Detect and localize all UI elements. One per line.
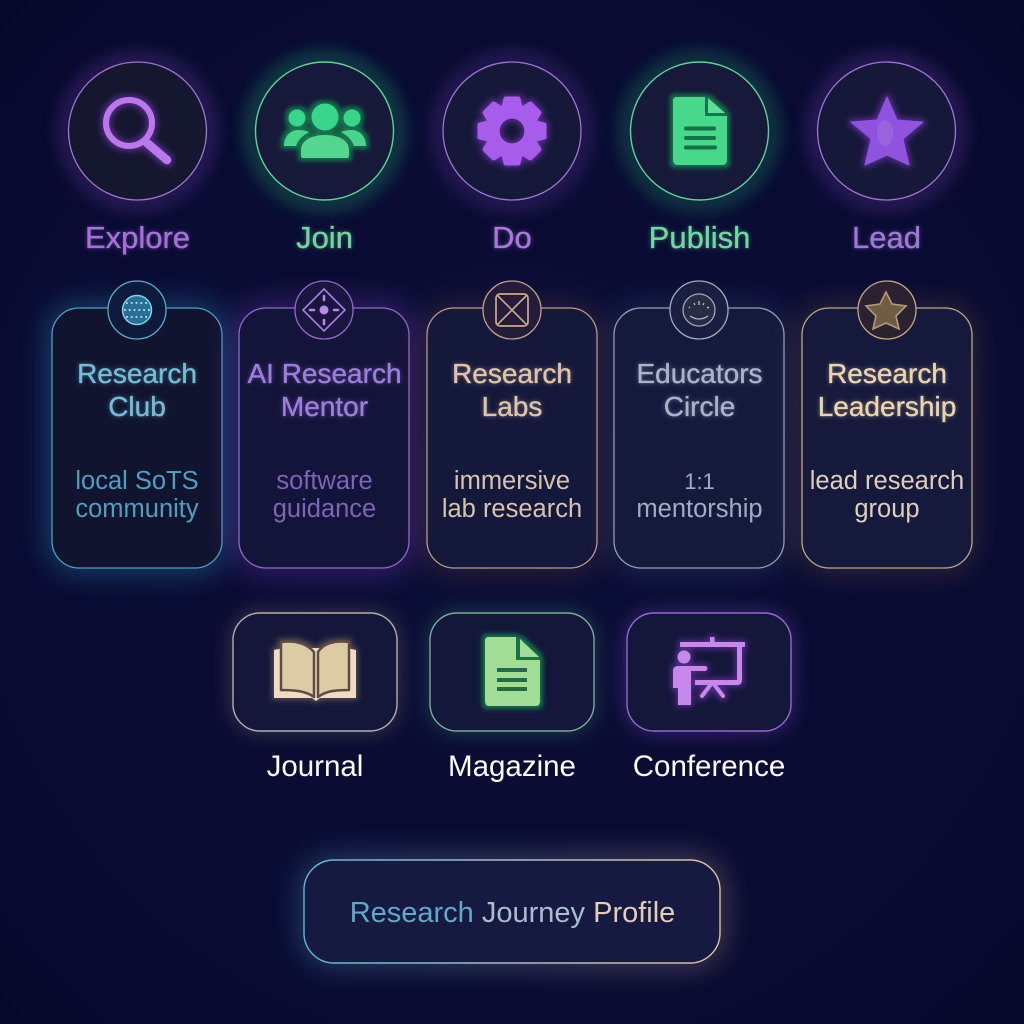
icon: gear <box>478 96 546 166</box>
step: Publish <box>628 59 772 255</box>
card title: Research <box>452 358 572 389</box>
icon: group of people <box>284 104 366 158</box>
icon: dotted globe badge <box>108 281 166 339</box>
card description: group <box>854 495 920 523</box>
card title: Leadership <box>818 391 956 422</box>
step: Explore <box>66 59 210 255</box>
card title: Circle <box>664 391 735 422</box>
card title: Educators <box>636 358 763 389</box>
label: Conference: Conference <box>633 750 785 783</box>
card description: software <box>276 467 373 495</box>
icon: diamond node badge <box>295 281 353 339</box>
card: AI Research Mentor <box>239 281 409 568</box>
card: Research Club <box>52 281 222 568</box>
step row: journey stages <box>66 59 958 255</box>
profile button <box>304 860 720 963</box>
icon: gold star badge <box>858 281 916 339</box>
card title: Labs <box>482 391 542 422</box>
icon: round dial badge <box>670 281 728 339</box>
step: Do <box>440 59 584 255</box>
label: Do: Do <box>492 220 532 255</box>
card title: Club <box>108 391 166 422</box>
card description: community <box>75 495 199 523</box>
card title: Mentor <box>281 391 368 422</box>
icon: star <box>851 97 923 165</box>
card description: mentorship <box>636 495 763 523</box>
program cards row <box>52 281 972 568</box>
step: Join <box>252 59 396 255</box>
card description: lead research <box>810 467 964 495</box>
icon: magnifying glass <box>106 100 167 160</box>
label: Lead: Lead <box>852 220 921 255</box>
card description: lab research <box>442 495 582 523</box>
icon: open book <box>274 641 356 701</box>
step: Lead <box>814 59 958 255</box>
label: Journal: Journal <box>267 750 363 783</box>
card description: guidance <box>273 495 376 523</box>
profile label: Research Journey Profile <box>350 897 675 929</box>
label: Join: Join <box>296 220 353 255</box>
icon: presenter at board <box>673 637 745 705</box>
card description: immersive <box>454 467 570 495</box>
card: Research Leadership <box>802 281 972 568</box>
label: Publish: Publish <box>649 220 750 255</box>
output: Magazine <box>430 613 594 783</box>
output: Journal <box>233 613 397 783</box>
output: Conference <box>627 613 791 783</box>
card description: local SoTS <box>75 467 199 495</box>
card title: Research <box>827 358 947 389</box>
label: Magazine: Magazine <box>448 750 576 783</box>
label: Explore: Explore <box>85 220 190 255</box>
card: Educators Circle <box>614 281 784 568</box>
card description: 1:1 <box>684 469 715 494</box>
card title: Research <box>77 358 197 389</box>
outputs row <box>233 613 791 783</box>
icon: document <box>673 97 727 165</box>
icon: document <box>485 637 540 706</box>
card: Research Labs <box>427 281 597 568</box>
icon: crossed square badge <box>483 281 541 339</box>
card title: AI Research <box>247 358 402 389</box>
